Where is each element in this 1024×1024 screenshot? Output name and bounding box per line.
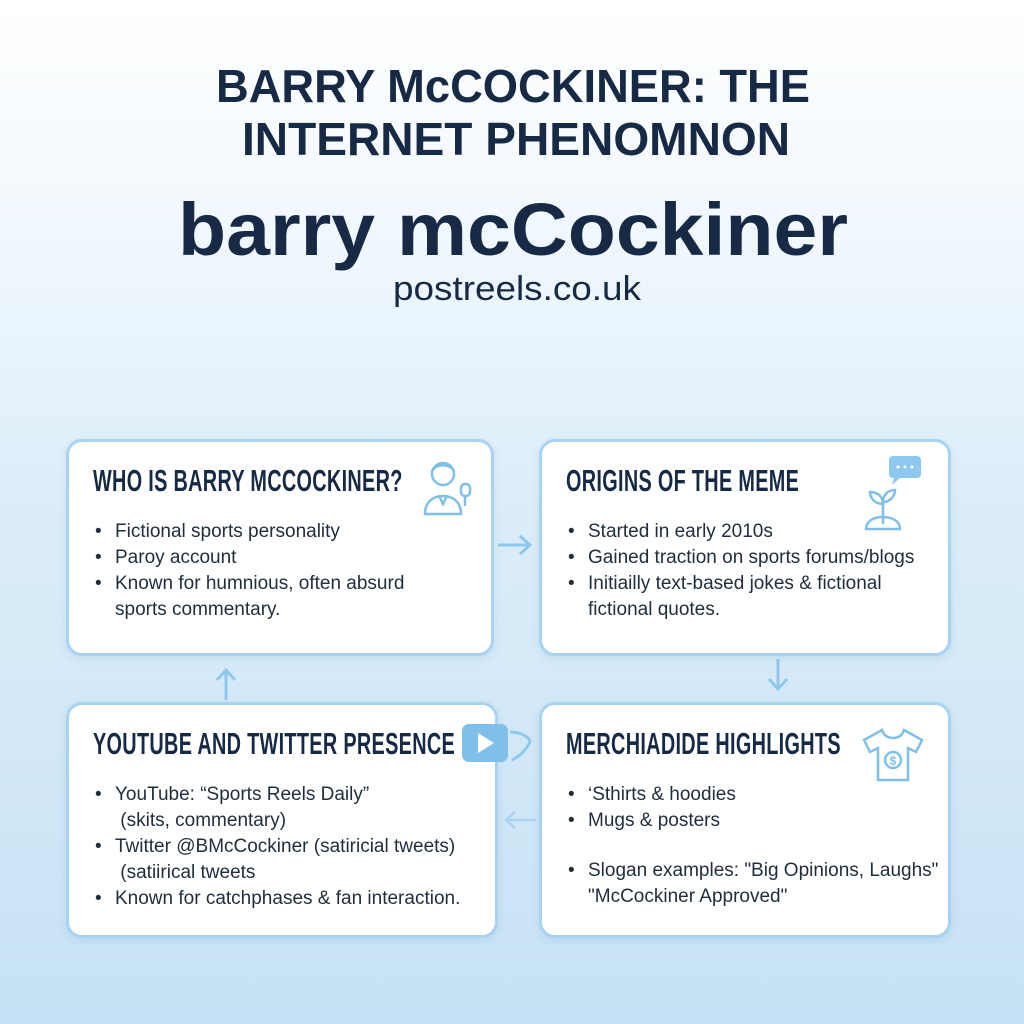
heading: origins: ORIGINS OF THE MEME xyxy=(566,463,799,498)
bullets: origins: fictional quotes. xyxy=(588,599,720,620)
bullets: who is xyxy=(96,521,404,620)
icon: t-shirt xyxy=(862,728,924,782)
bullets: origins xyxy=(568,521,914,620)
heading: merchandise: MERCHIADIDE HIGHLIGHTS xyxy=(566,726,841,761)
bullets: who is: Known for humnious, often absurd xyxy=(115,573,404,594)
panel: origins xyxy=(539,439,951,656)
icon: commentator xyxy=(424,462,472,516)
title xyxy=(178,60,848,308)
bullets: origins: Initiailly text-based jokes & fictional xyxy=(588,573,882,594)
bullets: who is: Fictional sports personality xyxy=(115,521,340,542)
arrow: right xyxy=(498,535,532,555)
bullets: merchandise: Mugs & posters xyxy=(588,810,720,831)
bullets: youtube twitter: Twitter @BMcCockiner (satiricial tweets) xyxy=(115,836,455,857)
icon: youtube play xyxy=(462,724,532,762)
bullets: youtube twitter: YouTube: “Sports Reels Daily” xyxy=(115,784,369,805)
title: barry mcCockiner xyxy=(178,188,848,271)
bullets: merchandise: "McCockiner Approved" xyxy=(588,886,787,907)
panel: youtube twitter xyxy=(66,702,498,938)
arrow: down xyxy=(768,659,788,691)
icon: t-shirt: $ xyxy=(890,754,897,768)
bullets: merchandise: ‘Sthirts & hoodies xyxy=(588,784,736,805)
heading: youtube twitter: YOUTUBE AND TWITTER PRESENCE xyxy=(93,726,455,761)
title: postreels.co.uk xyxy=(393,270,642,308)
bullets: youtube twitter: Known for catchphases & fan interaction. xyxy=(115,888,460,909)
bullets: merchandise xyxy=(568,784,938,907)
bullets: who is: Paroy account xyxy=(115,547,236,568)
icon: plant with speech bubble xyxy=(864,456,921,530)
heading: who is: WHO IS BARRY MCCOCKINER? xyxy=(93,463,403,498)
arrow: left xyxy=(504,811,536,829)
bullets: youtube twitter: (skits, commentary) xyxy=(120,810,286,831)
bullets: who is: sports commentary. xyxy=(115,599,280,620)
bullets: youtube twitter: (satiirical tweets xyxy=(120,862,255,883)
panel: merchandise xyxy=(539,702,951,938)
bullets: origins: Started in early 2010s xyxy=(588,521,773,542)
panel: who is xyxy=(66,439,494,656)
title: BARRY McCOCKINER: THE xyxy=(216,60,810,112)
arrow: up xyxy=(216,668,236,700)
bullets: merchandise: Slogan examples: "Big Opinions, Laughs" xyxy=(588,860,938,881)
bullets: origins: Gained traction on sports forums/blogs xyxy=(588,547,914,568)
title: INTERNET PHENOMNON xyxy=(242,113,790,165)
bullets: youtube twitter xyxy=(96,784,460,909)
